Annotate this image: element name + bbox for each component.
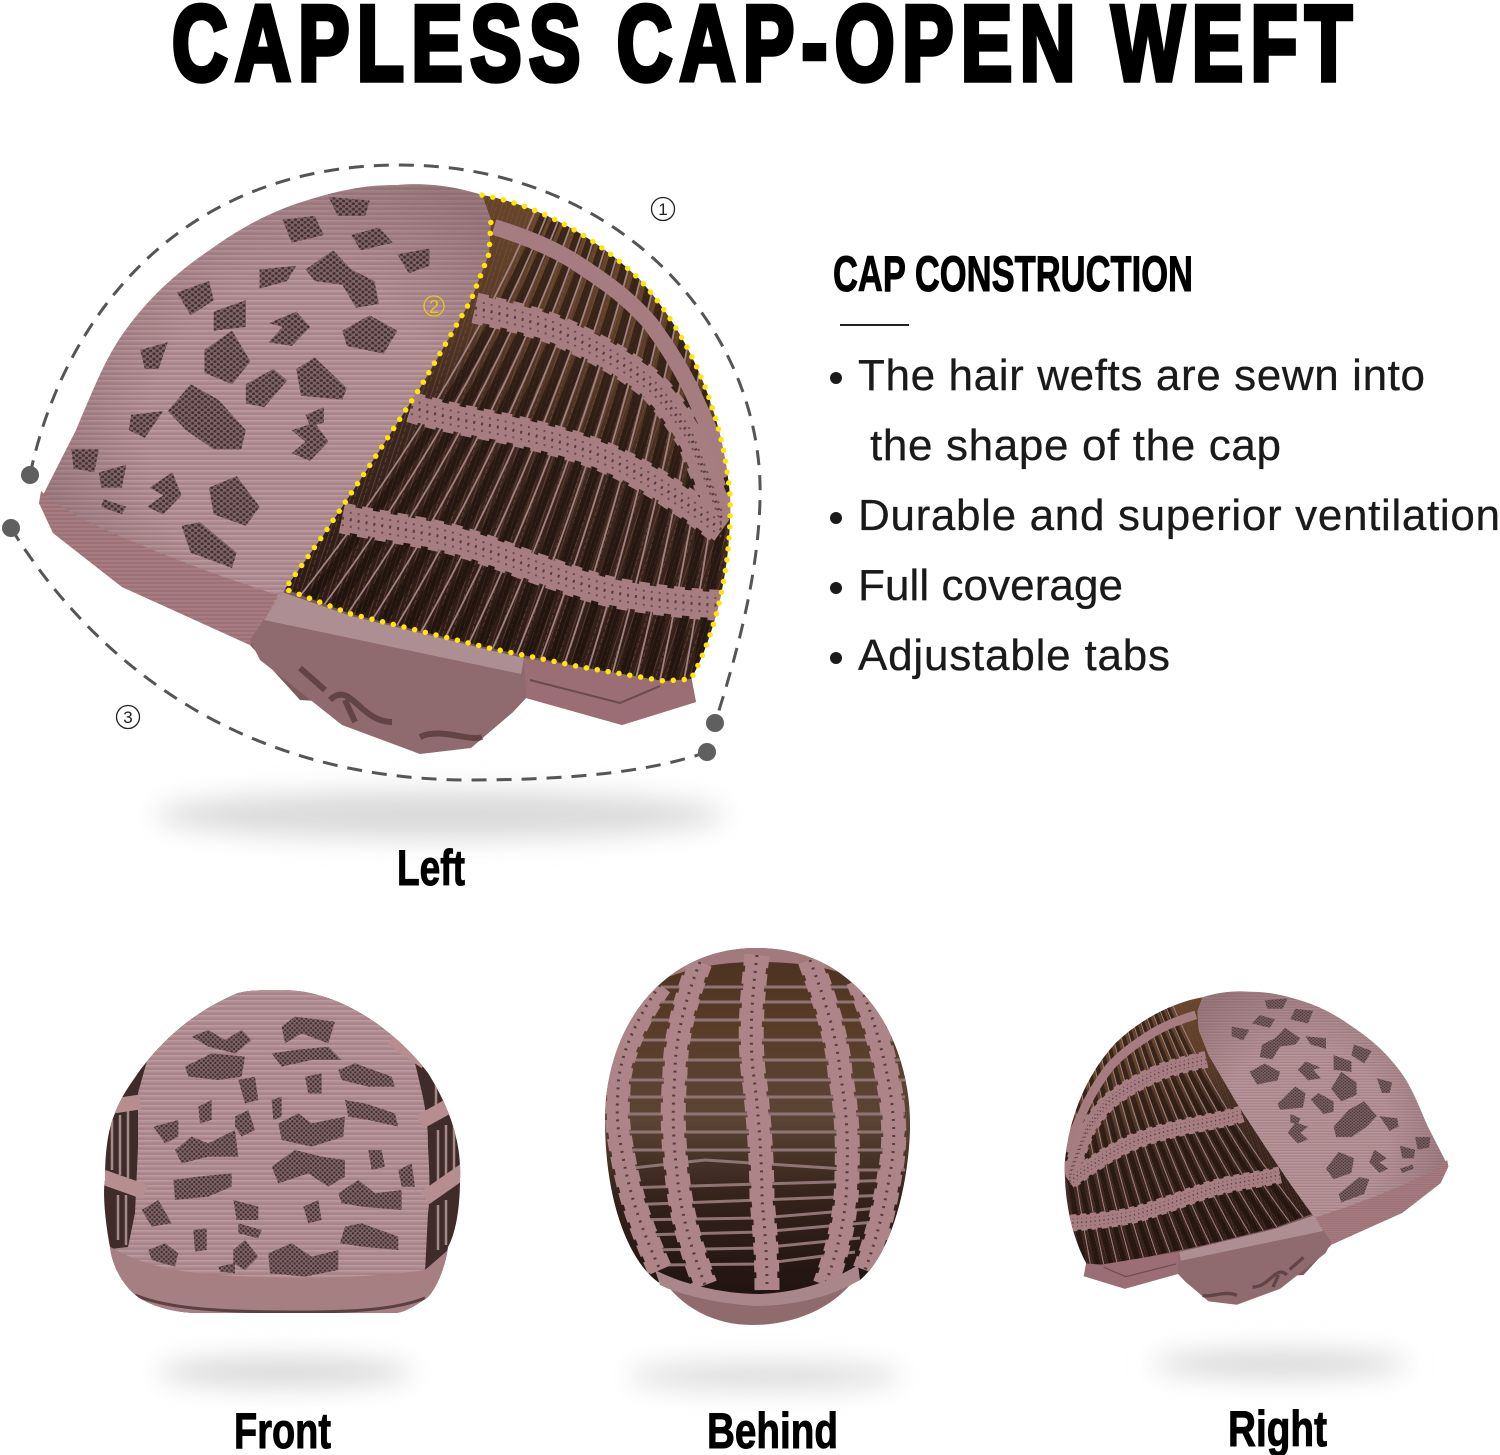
- lace flower mesh: [142, 1017, 415, 1277]
- bullet 2: Durable and superior ventilation: [858, 491, 1500, 540]
- dashed arc 3 under the cap: [2, 519, 716, 780]
- band edge: [135, 1295, 425, 1312]
- illustration: behind view of cap: [600, 945, 915, 1325]
- cap photo: left: [39, 184, 762, 754]
- illustration: left view of cap: [39, 184, 762, 754]
- heading: CAP CONSTRUCTION: [833, 246, 1193, 302]
- bullet 4: Adjustable tabs: [858, 631, 1170, 680]
- callout marker 3: 3: [123, 708, 133, 727]
- lace panel: [100, 985, 430, 1315]
- horizontal weft lines: [610, 987, 905, 1265]
- illustration: front view of cap: [100, 985, 465, 1320]
- yellow dotted outline of open weft area: [285, 195, 730, 681]
- label: Left: Left: [397, 840, 465, 896]
- bullet 3: Full coverage: [858, 561, 1123, 610]
- callout marker 1: 1: [658, 200, 668, 219]
- weft body: [600, 945, 915, 1295]
- hair through wefts: [600, 945, 915, 1295]
- shadow: left cap: [155, 791, 725, 839]
- crown rim: [668, 948, 838, 977]
- callout marker 1: [652, 198, 674, 220]
- bullet 1: The hair wefts are sewn into: [858, 351, 1425, 400]
- dashed arc 1 over the cap: [21, 165, 760, 732]
- shadow: right cap: [1152, 1351, 1408, 1377]
- side tapes: [100, 1038, 465, 1198]
- bullet 1: [830, 351, 1425, 470]
- side wefts: [100, 985, 465, 1315]
- callout marker 3: [116, 706, 140, 728]
- vertical lace tapes: [617, 955, 894, 1290]
- neck strip: [655, 1265, 860, 1306]
- neck area: [660, 1275, 858, 1325]
- callout marker 2: [424, 296, 444, 317]
- panel: cap construction: [830, 246, 1500, 680]
- heading rule: [840, 324, 909, 326]
- callout marker 2: 2: [429, 297, 439, 317]
- illustration: right view of cap: [1047, 991, 1448, 1305]
- bullet 1: the shape of the cap: [870, 421, 1281, 470]
- lace tape dots: [617, 955, 894, 1290]
- shadow: behind cap: [627, 1363, 903, 1389]
- weft stripes: [112, 1075, 454, 1250]
- shadow: front cap: [157, 1358, 413, 1386]
- bottom band: [110, 1246, 448, 1313]
